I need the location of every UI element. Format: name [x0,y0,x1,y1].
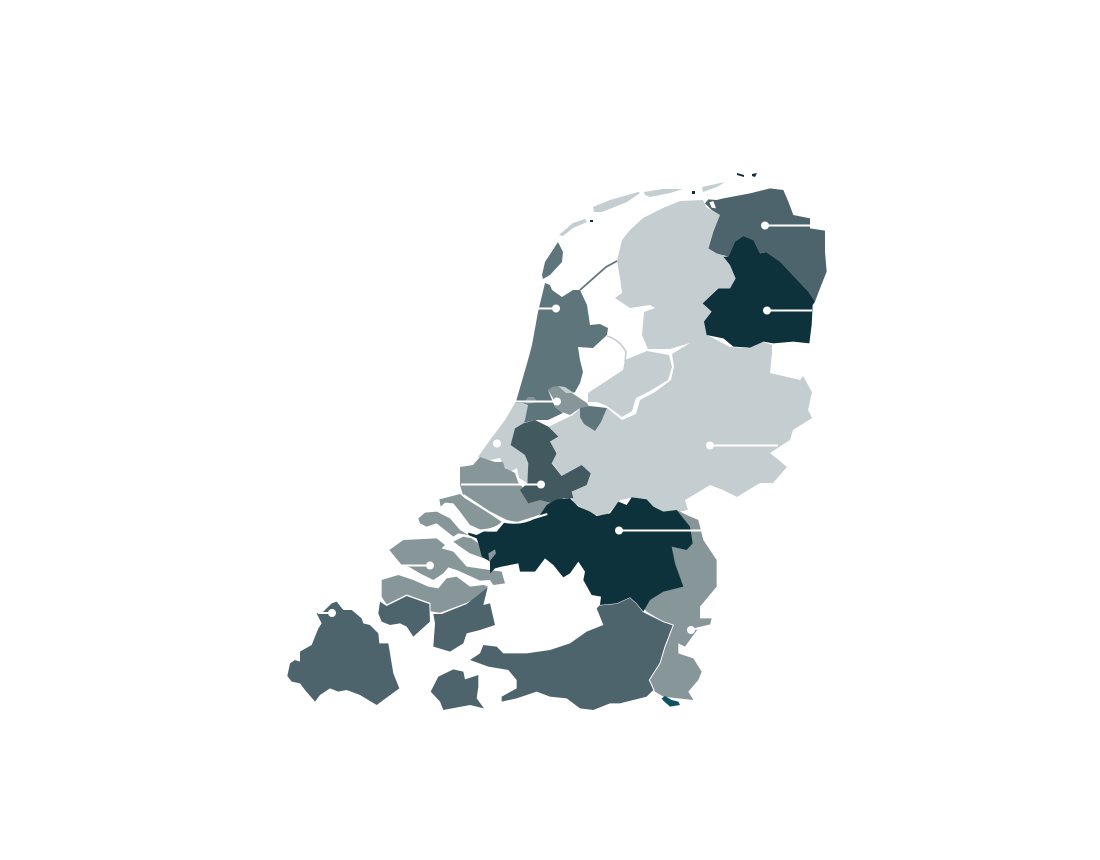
region: Utrecht [511,420,591,503]
leader: West Flanders [318,609,336,617]
leader: South Holland [461,480,545,488]
dike: Afsluitdijk [580,261,617,290]
region: Drenthe [703,236,815,348]
region: South Limburg tip [662,696,680,707]
region: Walcheren and Beveland [389,538,505,585]
region: small coastal lump [525,397,537,404]
region: North Brabant [468,497,693,612]
leader: Drenthe [763,306,812,314]
region: Het Gooi north [558,386,574,393]
region: South Holland coast [478,403,530,483]
southern group [378,494,717,710]
leader: North Holland [538,304,560,312]
region: Noord-Holland [515,283,608,423]
region: Utrecht lakes [548,386,590,415]
river: Western Scheldt and Meuse mouth [463,495,547,531]
dike: Markermeer [607,336,626,362]
leader: Gelderland [706,442,778,450]
region: Belgian Limburg and Antwerp [470,597,673,710]
small dark islets [590,173,757,222]
region: Zeeland south-west polder [378,596,430,637]
region: Zeeuws-Vlaanderen [382,575,488,613]
region: Small Flemish area [431,669,484,710]
border line with the Netherlands [600,597,673,690]
leader: Zeeland [400,562,434,570]
region: small Brabant enclave [488,549,496,562]
leader: Groningen [761,222,812,230]
region: East Zeeuws-Vlaanderen [433,587,495,652]
region: Texel [542,242,563,279]
leader: Limburg [687,625,712,634]
leader: North Brabant [615,526,703,534]
region: West Flanders [287,602,399,705]
region: Friesland, Overijssel and Gelderland [548,200,812,515]
region: Tholen [453,537,488,560]
region: South Holland [460,457,555,522]
region: Gooi [580,406,607,431]
region: Goeree-Overflakkee [439,494,503,532]
leader dot: The Hague [493,440,501,448]
region: Flevoland [588,351,672,417]
border line: Zeeuws-Vlaanderen [382,587,488,613]
region: Schouwen [418,512,468,537]
region: Groningen [705,188,827,302]
region: Limburg [637,510,717,700]
Wadden islands [559,182,725,236]
map of the Netherlands and Flanders [287,173,827,710]
leader: Utrecht [516,398,561,406]
